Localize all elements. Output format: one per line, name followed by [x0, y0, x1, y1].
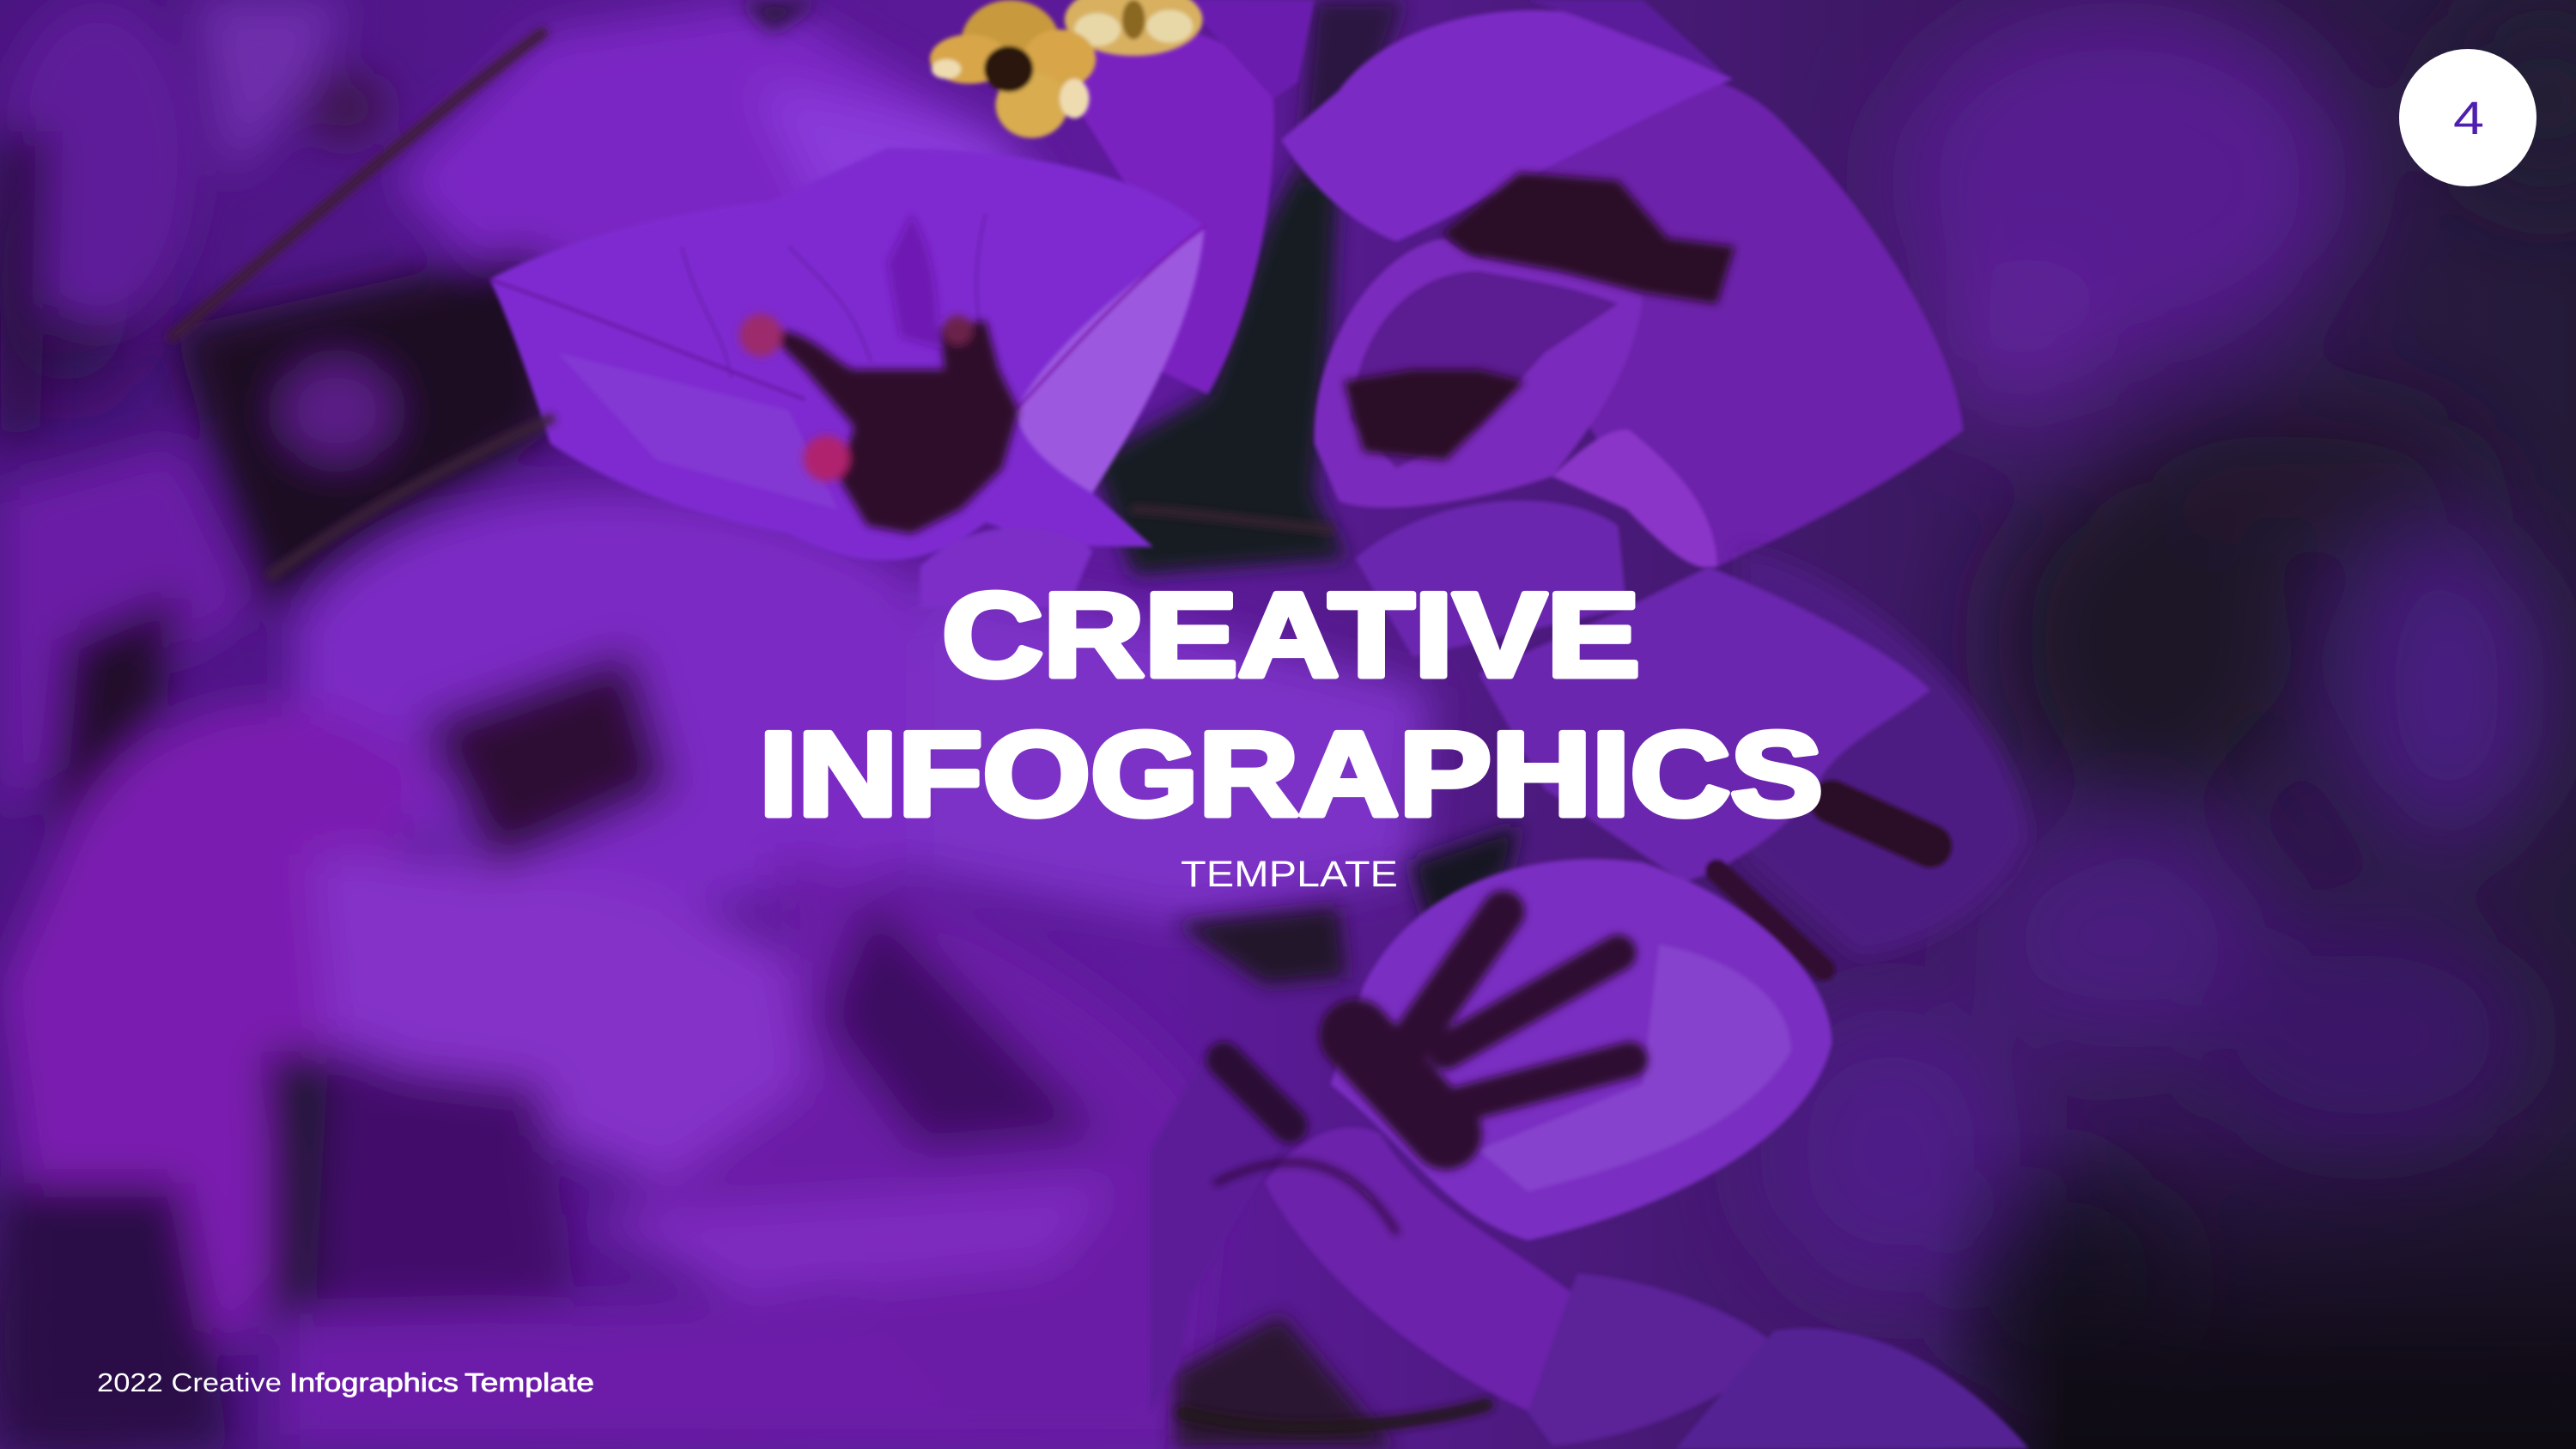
upper right flower — [1281, 0, 1963, 657]
footer text: Template — [465, 1367, 594, 1397]
dark bottom-right corner — [1953, 1161, 2576, 1449]
title: CREATIVE — [942, 569, 1640, 702]
lower flower — [1150, 859, 2029, 1449]
main flower petal with veins — [489, 148, 1204, 608]
blurred foreground petals at left — [0, 0, 1430, 1449]
title: INFOGRAPHICS — [759, 708, 1823, 841]
page number badge — [2399, 49, 2537, 186]
footer text: 2022 Creative — [97, 1367, 282, 1397]
page number badge: 4 — [2453, 93, 2484, 144]
middle right flower — [1741, 551, 2029, 956]
yellow small flowers — [930, 0, 1203, 138]
footer text: Infographics — [289, 1367, 459, 1397]
main flower stamens — [739, 214, 1018, 534]
upper right flower stamens — [1344, 173, 1735, 460]
lower flower stamens — [1183, 912, 1630, 1428]
petal behind main flower — [1051, 0, 1315, 394]
dark gaps between flowers — [739, 0, 1520, 1449]
subtitle: TEMPLATE — [1181, 854, 1398, 895]
footer text — [97, 1367, 594, 1397]
title — [759, 569, 1823, 841]
thin stems at upper left — [173, 33, 1331, 575]
middle right petal and stamen — [1479, 567, 1930, 969]
